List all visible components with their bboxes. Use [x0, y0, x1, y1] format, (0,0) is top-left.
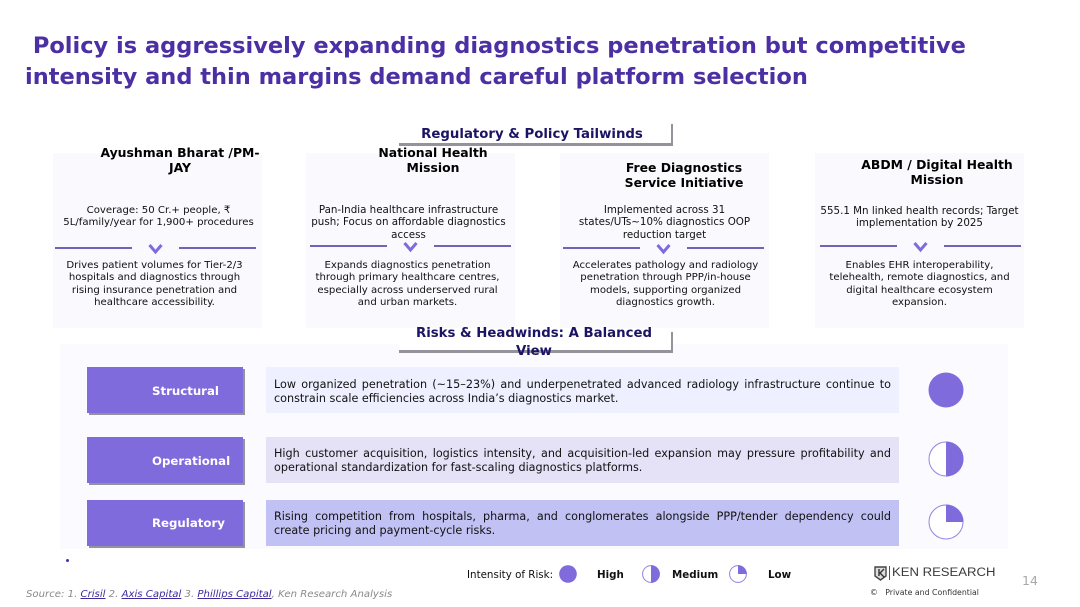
card 3 impact text: [572, 260, 758, 308]
card 4 impact text: expansion.: [892, 297, 947, 308]
card 1 coverage text: 5L/family/year for 1,900+ procedures: [63, 217, 254, 228]
card 4 impact text: Enables EHR interoperability,: [846, 260, 993, 271]
logo: Ken Research: [874, 566, 995, 581]
text: structural: Low organized penetration (~15–23%) and underpenetrated advanced radiology infrastructure continue to constrain scale efficiencies across India’s diagnostics market.: [274, 378, 891, 405]
card 4 coverage text: implementation by 2025: [856, 217, 983, 229]
card 2 coverage text: push; Focus on affordable diagnostics: [311, 216, 506, 228]
card 4 heading: Mission: [911, 172, 963, 187]
icon: high pie: [928, 372, 964, 408]
label: structural: Structural: [152, 384, 219, 398]
card 3 impact text: models, supporting organized: [590, 285, 741, 296]
card: Free Diagnostics: [560, 153, 769, 328]
icon: low pie: [928, 504, 964, 540]
title: Policy is aggressively expanding diagnostics penetration but competitive intensity and thin margins demand careful platform selection: [25, 33, 966, 90]
legend: [467, 565, 791, 583]
card 3 coverage text: states/UTs~10% diagnostics OOP: [579, 216, 750, 228]
card 1 impact text: rising insurance penetration and: [72, 285, 237, 296]
card 2 impact text: through primary healthcare centres,: [316, 272, 499, 283]
card 1 heading: JAY: [169, 160, 191, 175]
card 2 impact text: Expands diagnostics penetration: [324, 260, 490, 271]
card 1 coverage text: [63, 205, 254, 228]
card 4 impact text: digital healthcare ecosystem: [846, 285, 993, 296]
card 2 heading: National Health: [378, 145, 488, 160]
legend low icon: [729, 565, 747, 583]
card 3 heading: Service Initiative: [625, 175, 743, 190]
card 1 heading: [100, 145, 260, 175]
card: National Health Mission: [306, 153, 515, 328]
text: operational: High customer acquisition, logistics intensity, and acquisition-led expansion may pressure profitability and operational standardization for fast-scaling diagnostics platforms.: [274, 447, 891, 474]
card 1 impact text: Drives patient volumes for Tier-2/3: [66, 260, 243, 271]
card 3 impact text: Accelerates pathology and radiology: [573, 260, 758, 271]
page number: 14: [1022, 573, 1038, 588]
label: regulatory: Regulatory: [152, 516, 225, 530]
label: operational: Operational: [152, 454, 230, 468]
section heading: risks box: [399, 332, 673, 353]
card 3 coverage text: reduction target: [623, 229, 706, 241]
icon: medium pie: [928, 442, 964, 476]
card 2 impact text: and urban markets.: [358, 297, 457, 308]
card 2 heading: Mission: [407, 160, 459, 175]
section heading: risks text: [416, 326, 652, 358]
card 2 impact text: especially across underserved rural: [317, 285, 498, 296]
legend medium: Medium: [672, 569, 718, 581]
card 1 divider: [55, 244, 256, 254]
card 4 coverage text: 555.1 Mn linked health records; Target: [820, 205, 1019, 217]
label: structural: [87, 367, 243, 413]
legend high: High: [597, 569, 624, 581]
legend low: Low: [768, 569, 791, 581]
text: regulatory: Rising competition from hospitals, pharma, and conglomerates alongside PPP/tender dependency could create pricing and payment-cycle risks.: [274, 510, 891, 537]
legend label: Intensity of Risk:: [467, 569, 553, 581]
logo: Ken Research: KEN RESEARCH: [892, 567, 995, 579]
card 3 coverage text: [579, 204, 750, 241]
card 1 coverage text: Coverage: 50 Cr.+ people, ₹: [87, 205, 230, 216]
card 3 heading: [625, 160, 743, 190]
card 2 heading: [378, 145, 488, 175]
card: Ayushman Bharat: [53, 153, 262, 328]
stray bullet: [66, 559, 69, 562]
text: operational: [266, 437, 899, 483]
card 3 impact text: penetration through PPP/in-house: [580, 272, 751, 283]
label: regulatory: [87, 500, 243, 546]
card 2 impact text: [316, 260, 499, 308]
card 4 coverage text: [820, 205, 1019, 229]
card 3 coverage text: Implemented across 31: [604, 204, 725, 216]
card 2 coverage text: access: [391, 229, 426, 241]
card 4 heading: [861, 157, 1013, 187]
card 2 coverage text: Pan-India healthcare infrastructure: [319, 204, 498, 216]
section heading: risks text: Risks & Headwinds: A Balanced: [416, 326, 652, 341]
card 1 heading: Ayushman Bharat /PM-: [100, 145, 260, 160]
card 2 divider: [310, 242, 511, 252]
card 4 impact text: [829, 260, 1010, 308]
card 1 impact text: healthcare accessibility.: [94, 297, 215, 308]
card 4 heading: ABDM / Digital Health: [861, 157, 1013, 172]
section heading: risks text: View: [516, 344, 552, 358]
section heading: regulatory tailwinds: Regulatory & Policy Tailwinds: [421, 127, 643, 142]
text: structural: [266, 367, 899, 413]
section heading: regulatory tailwinds box: [399, 124, 673, 146]
card 2 coverage text: [311, 204, 506, 241]
text: regulatory: [266, 500, 899, 546]
confidentiality note: © Private and Confidential: [870, 588, 979, 597]
label: operational: [87, 437, 243, 483]
card 3 divider: [563, 244, 764, 254]
card: ABDM: [815, 153, 1024, 328]
legend high icon: [559, 565, 577, 583]
card 1 impact text: hospitals and diagnostics through: [69, 272, 240, 283]
card 4 divider: [820, 242, 1021, 252]
source line: Source: 1. Crisil 2. Axis Capital 3. Phillips Capital, Ken Research Analysis: [26, 589, 392, 600]
card 3 heading: Free Diagnostics: [626, 160, 742, 175]
card 4 impact text: telehealth, remote diagnostics, and: [829, 272, 1010, 283]
card 1 impact text: [66, 260, 243, 308]
card 3 impact text: diagnostics growth.: [616, 297, 715, 308]
legend medium icon: [642, 565, 660, 583]
panel: risks background: [60, 344, 1008, 549]
